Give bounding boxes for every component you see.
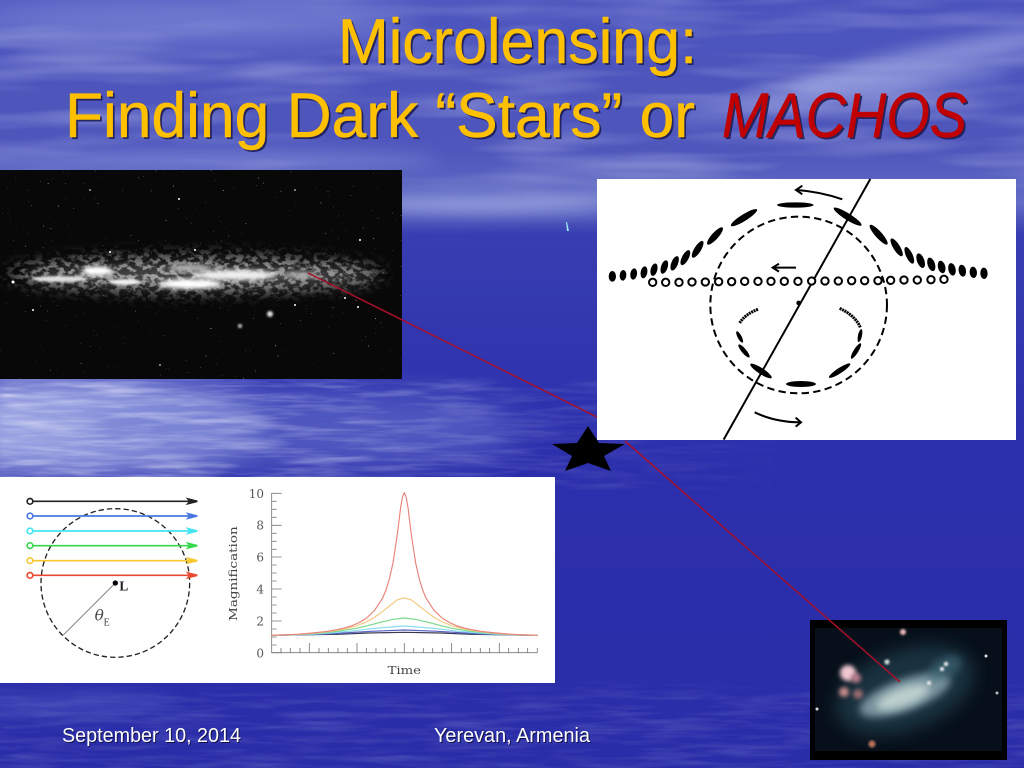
axis labels: 2 bbox=[256, 614, 264, 628]
title line 2: MACHOS bbox=[724, 83, 969, 153]
axis labels: 10 bbox=[249, 487, 264, 501]
source trajectories diagram: θ bbox=[95, 606, 104, 624]
magnification light curve chart: Time bbox=[388, 663, 421, 677]
panel: lens trajectories and light curve figure bbox=[0, 477, 555, 683]
axis labels: 6 bbox=[256, 551, 264, 565]
title line 1 shadow and text: Microlensing: bbox=[338, 7, 697, 77]
outer image arc filled ellipses bbox=[609, 202, 988, 282]
source trajectories diagram: L bbox=[119, 578, 128, 593]
title line 2: Finding Dark “Stars” or bbox=[67, 83, 697, 153]
black star: lens bbox=[552, 426, 625, 471]
source trajectories diagram bbox=[27, 498, 197, 657]
axes and ticks bbox=[272, 493, 537, 653]
footer location: Yerevan, Armenia bbox=[434, 725, 591, 747]
title bbox=[65, 7, 969, 153]
red sight line from star to Magellanic Cloud bbox=[625, 441, 900, 682]
title line 1 shadow and text: Microlensing: bbox=[340, 9, 699, 79]
small cyan mark bbox=[566, 222, 569, 231]
footer date: September 10, 2014 bbox=[62, 725, 241, 747]
footer location: Yerevan, Armenia bbox=[435, 726, 592, 748]
Einstein ring dashed circle bbox=[710, 217, 887, 393]
footer date: September 10, 2014 bbox=[63, 726, 242, 748]
source trajectories diagram: E bbox=[104, 617, 110, 628]
magnification light curve chart: Magnification bbox=[226, 526, 240, 621]
panel: Large Magellanic Cloud photo bbox=[810, 620, 1007, 760]
axis labels: 0 bbox=[256, 646, 264, 660]
title line 2: MACHOS bbox=[722, 81, 967, 151]
red sight line from Milky Way to star bbox=[308, 273, 597, 417]
inner image arc bbox=[735, 308, 863, 387]
axis labels: 4 bbox=[256, 583, 264, 597]
panel: microlensing image diagram bbox=[597, 179, 1016, 440]
motion arrows bbox=[755, 186, 842, 427]
trajectory arrows bbox=[27, 498, 197, 578]
light curves bbox=[271, 493, 538, 635]
magnification light curve chart bbox=[226, 487, 538, 677]
title line 2 bbox=[65, 81, 969, 153]
panel: Milky Way panorama photo bbox=[0, 170, 402, 379]
axis labels bbox=[249, 487, 264, 660]
lens axis line bbox=[724, 179, 870, 440]
axis labels: 8 bbox=[256, 519, 264, 533]
title line 2: Finding Dark “Stars” or bbox=[65, 81, 695, 151]
source track open circles bbox=[649, 276, 948, 286]
